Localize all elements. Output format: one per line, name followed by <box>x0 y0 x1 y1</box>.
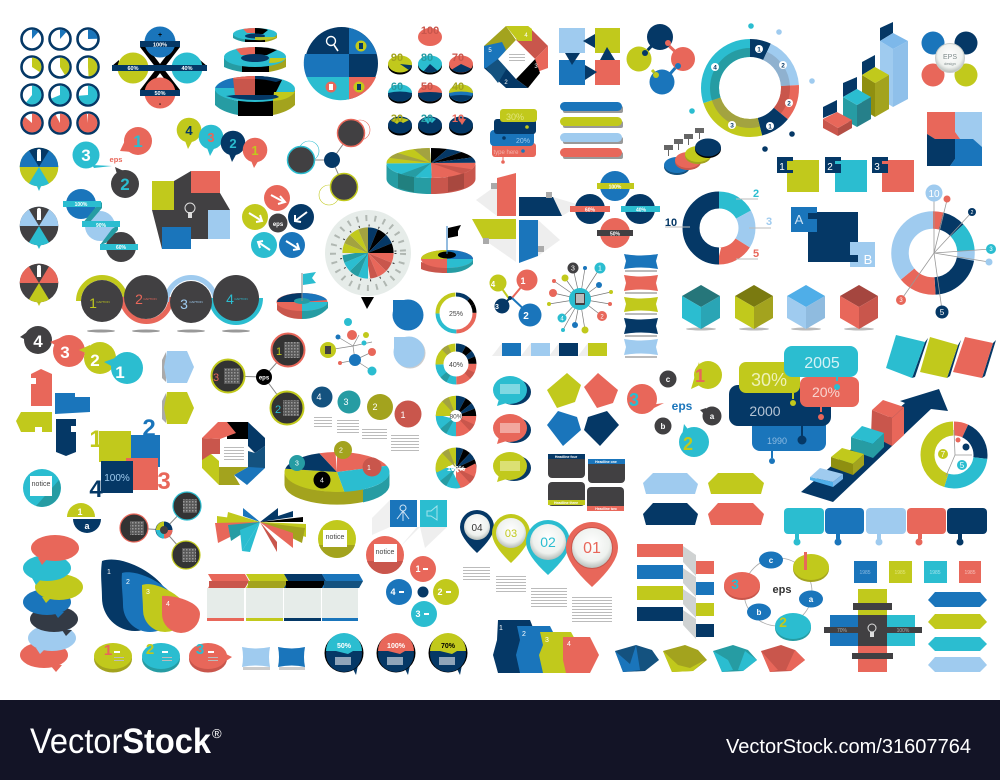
caption circles chain <box>78 275 260 332</box>
numbered overlapping squares 100%: 4 <box>89 476 103 503</box>
eps ring of bubbles top: 2 <box>683 434 693 454</box>
donut with radial labels: 3 <box>989 247 993 253</box>
ring chart 80% <box>443 403 469 429</box>
tablet hub with numbered spokes: 3 <box>571 266 575 272</box>
notice circle olive <box>318 520 356 558</box>
stacked percent labels 30 20 type here <box>490 109 537 164</box>
numbered squares 1 2 3 <box>777 157 914 192</box>
segmented donut 1-2-2-1-3-4: 2 <box>781 62 785 70</box>
abc disc cycle <box>724 552 829 641</box>
octagon four-step diagram: 2 <box>504 80 508 86</box>
3D percent mini pies: 80 <box>421 52 433 64</box>
plain blue tabbed circle <box>392 300 424 330</box>
abc disc cycle: eps <box>773 584 791 596</box>
abc disc cycle: 3 <box>731 576 739 592</box>
octagon four-step diagram: 4 <box>524 33 528 39</box>
caption circles chain: 4 <box>226 291 234 307</box>
four circles with EPS badge: design <box>944 61 956 66</box>
footer band: ® <box>212 726 222 741</box>
donut with radial labels: 2 <box>971 210 974 216</box>
radial fan of folded blades <box>215 508 306 552</box>
outer ring <box>710 48 790 128</box>
speech bubbles 4 3 2 1 <box>177 118 267 168</box>
four ribbon circles 100 60 40 50: 60% <box>585 208 596 214</box>
headline panels: Headline four <box>555 455 578 459</box>
disc notes 1 2 3 <box>94 641 232 672</box>
pill list <box>560 102 623 159</box>
person pie: red dark <box>20 264 58 306</box>
segmented donut 1-2-2-1-3-4: 1 <box>768 124 772 130</box>
year callout cluster: 1990 <box>767 436 787 446</box>
ring chart 40%: 40% <box>449 362 463 369</box>
four squares with triangles <box>559 28 620 85</box>
stacked 3D rings <box>215 28 295 116</box>
stacked percent labels 30 20 type here: 30% <box>506 112 524 122</box>
ring medium <box>224 47 286 72</box>
pinched squares <box>242 647 305 670</box>
numbered overlapping squares 100%: 2 <box>142 415 156 442</box>
spheres 4 3 2 1: 2 <box>372 402 378 412</box>
A B overlapping squares: B <box>864 252 872 267</box>
1985 squares <box>854 561 981 583</box>
cross with lightbulb and bars: 70% <box>837 628 848 634</box>
four ribbon circles 100 60 40 50: 50% <box>610 232 621 238</box>
teal bubble with 3: 3 <box>81 146 91 165</box>
four-tile square <box>927 112 982 166</box>
overlapping speech stickers 4 3 2 1 <box>20 326 143 384</box>
cluster of numbered circles: 3 <box>415 609 421 619</box>
icon squares person and speaker <box>372 500 447 548</box>
stacked speech ovals <box>20 535 83 672</box>
3D bar chart with flags <box>823 22 908 136</box>
eps label red: eps <box>110 155 122 164</box>
full pie 100% <box>446 458 466 478</box>
clock ring percent grid <box>22 28 98 134</box>
numbered overlapping squares 100%: 1 <box>89 426 103 453</box>
cluster of numbered circles: 4 <box>390 587 396 597</box>
donut 7 3 5 with lines: 7 <box>941 450 946 459</box>
donut 10 2 3 5: 2 <box>753 188 759 200</box>
overlapping speech stickers 4 3 2 1: 2 <box>90 351 100 370</box>
cross of percent circles: 50% <box>154 91 166 97</box>
caption circles chain: 1 <box>89 295 97 311</box>
hex steps 1 2 3 4: 3 <box>545 637 549 644</box>
location pins 04 03 02 01: 01 <box>583 540 601 557</box>
hub network with dark circles <box>288 120 370 205</box>
ring chart 80%: 80% <box>449 414 463 420</box>
full pie 100%: 100% <box>447 466 466 473</box>
3D percent mini pies: 90 <box>391 52 403 64</box>
caption circles chain: CAPTION <box>234 297 248 301</box>
cross of percent circles: 100% <box>153 42 167 48</box>
cluster of numbered circles: 1 <box>415 564 421 574</box>
cross of percent circles: 60% <box>127 66 139 72</box>
teardrop steps 1 2 3 4: 4 <box>166 601 170 608</box>
notice circle red <box>366 536 404 574</box>
eps ring of bubbles top: 1 <box>695 366 705 386</box>
spheres 4 3 2 1: 1 <box>400 410 406 420</box>
cluster of numbered circles <box>386 556 459 627</box>
numbered overlapping squares 100% <box>89 415 171 503</box>
eps ring of bubbles top: b <box>661 422 666 431</box>
four node network: 1 <box>520 276 526 286</box>
octagon four-step diagram: 5 <box>488 48 492 54</box>
speech circle 50%: 50% <box>337 643 352 650</box>
textured three-circle network: eps <box>259 376 270 382</box>
3D pie with balls: 4 <box>320 478 324 484</box>
arrow headed columns <box>207 574 363 621</box>
speech bubbles 4 3 2 1: 3 <box>207 130 215 145</box>
donut 7 3 5 with lines <box>928 428 980 482</box>
A B overlapping squares: A <box>795 212 804 227</box>
speech circle 70% <box>428 633 468 675</box>
speech circle 50% <box>324 633 364 675</box>
1985 squares: 1985 <box>859 570 871 576</box>
notice circle red: notice <box>376 549 394 556</box>
half circles 1 and a <box>67 503 101 533</box>
callout tab row <box>784 508 987 546</box>
A B overlapping squares <box>791 207 875 267</box>
small color squares row <box>492 343 607 356</box>
3D percent mini pies: 10 <box>452 113 464 125</box>
half circles 1 and a: 1 <box>77 507 83 517</box>
light blue hexagon tab <box>162 351 194 383</box>
headline panels: Headline three <box>554 501 578 505</box>
person pie: light blue dark <box>20 207 58 249</box>
notice circle teal <box>23 469 61 507</box>
eps ring of bubbles top: a <box>710 412 715 421</box>
location pins 04 03 02 01 <box>460 510 618 587</box>
folded pinwheel panels <box>472 173 580 263</box>
hex steps 1 2 3 4 <box>493 620 599 673</box>
abc disc cycle: c <box>769 556 774 565</box>
disc notes 1 2 3: 3 <box>196 641 204 658</box>
overlapping speech stickers 4 3 2 1: 4 <box>33 332 43 351</box>
segmented donut 1-2-2-1-3-4 <box>689 23 815 152</box>
arrow circles around eps <box>242 185 314 258</box>
spheres 4 3 2 1 <box>312 386 422 428</box>
3D pie with balls: 2 <box>339 448 343 454</box>
grey text blocks beside spheres <box>314 417 419 452</box>
cluster of numbered circles: 2 <box>437 587 443 597</box>
donut 7 3 5 with lines: 5 <box>960 461 965 470</box>
tilted cards <box>886 335 996 378</box>
donut with radial labels: 10 <box>928 189 940 200</box>
speech bubbles 4 3 2 1: 1 <box>251 143 259 158</box>
four ribbon circles 100 60 40 50: 40% <box>636 208 647 214</box>
abc disc cycle: b <box>757 608 762 617</box>
cross of percent circles: + <box>158 32 162 39</box>
four node network <box>490 270 542 326</box>
3D pie with balls: 1 <box>367 465 371 472</box>
year callout cluster: 20% <box>812 384 840 400</box>
donut 10 2 3 5: 5 <box>753 248 759 260</box>
person pie: blue olive <box>20 148 58 191</box>
3D percent mini pies <box>388 25 473 136</box>
disc notes 1 2 3: 1 <box>104 642 112 659</box>
speech bubble red <box>493 414 531 444</box>
teardrop steps 1 2 3 4: 2 <box>126 579 130 586</box>
red bubble with 1: 1 <box>133 132 143 151</box>
segmented donut 1-2-2-1-3-4: 4 <box>713 64 717 72</box>
hex steps 1 2 3 4: 4 <box>567 641 571 648</box>
year callout cluster: 30% <box>751 370 787 390</box>
eps ring of bubbles top: 3 <box>629 390 639 410</box>
cross with lightbulb and bars: 100% <box>897 628 910 634</box>
teardrop steps 1 2 3 4: 1 <box>107 569 111 576</box>
1985 squares: 1985 <box>964 570 976 576</box>
speech bubbles 4 3 2 1: 2 <box>229 136 237 151</box>
speech circle 100% <box>376 633 416 675</box>
abc disc cycle: 2 <box>779 614 787 630</box>
segmented donut 1-2-2-1-3-4: 1 <box>757 46 761 54</box>
tablet hub with numbered spokes: 2 <box>600 314 604 320</box>
3D pie with balls: 3 <box>295 460 299 468</box>
textured three-circle network: 2 <box>275 404 281 416</box>
hexagon strips <box>928 592 987 672</box>
year callout cluster: 2000 <box>749 403 781 419</box>
notice circle olive: notice <box>326 534 344 541</box>
folded horizontal list <box>637 544 714 639</box>
overlapping speech stickers 4 3 2 1: 1 <box>115 363 125 382</box>
circle with search icon grid <box>304 27 378 100</box>
four circles with EPS badge <box>922 32 978 86</box>
teardrop steps 1 2 3 4 <box>101 560 200 633</box>
3D percent mini pies: 100 <box>421 25 439 37</box>
tablet hub with numbered spokes <box>547 262 613 334</box>
numbered squares 1 2 3: 3 <box>874 162 880 173</box>
segmented donut 1-2-2-1-3-4: 2 <box>787 100 791 108</box>
stair of ribbon circles 100 90 60 <box>63 189 138 262</box>
segmented donut 1-2-2-1-3-4: 3 <box>730 122 734 130</box>
four squares around lightbulb <box>152 171 230 249</box>
small textured network <box>120 492 201 569</box>
cross of percent circles: 40% <box>181 66 193 72</box>
hex steps 1 2 3 4: 1 <box>499 625 503 632</box>
black pointer triangle <box>361 297 374 309</box>
donut with radial labels: 3 <box>899 298 903 304</box>
ring chart 25% <box>438 294 474 332</box>
footer band <box>0 700 1000 780</box>
radial wheel with pie <box>325 210 411 296</box>
ribbon stack <box>624 254 658 358</box>
textured three-circle network <box>212 334 304 424</box>
spheres 4 3 2 1: 4 <box>316 392 322 402</box>
four node network: 2 <box>523 311 529 322</box>
donut 10 2 3 5: 3 <box>766 216 772 228</box>
flag on disc, teal flag <box>276 272 328 319</box>
numbered squares 1 2 3: 1 <box>779 162 785 173</box>
row of 3D cubes <box>682 285 878 330</box>
teal bubble with 3 <box>72 142 112 168</box>
3D percent mini pies: 70 <box>452 52 464 64</box>
donut with radial labels: 5 <box>940 308 945 317</box>
numbered overlapping squares 100%: 3 <box>157 468 171 495</box>
four node network: 3 <box>495 304 499 311</box>
footer band: VectorStock.com/31607764 <box>726 736 971 758</box>
caption circles chain: 2 <box>135 291 143 307</box>
flag on disc, black flag <box>421 225 473 273</box>
donut 10 2 3 5 <box>665 188 772 260</box>
four node network: 4 <box>491 280 496 289</box>
speech bubbles 4 3 2 1: 4 <box>185 123 193 138</box>
3D pie with balls <box>284 441 390 505</box>
stacked discs on sign posts <box>664 128 721 175</box>
dark bubble with 2 <box>111 167 139 198</box>
ring chart 40% <box>440 348 472 380</box>
stair of ribbon circles 100 90 60: 60% <box>116 245 127 251</box>
olive hexagon tab <box>162 392 194 424</box>
3D percent mini pies: 50 <box>421 81 433 93</box>
numbered squares 1 2 3: 2 <box>827 162 833 173</box>
stacked percent labels 30 20 type here: type here <box>493 150 519 156</box>
trapezoid banners <box>643 473 764 525</box>
year callout cluster: 2005 <box>804 355 840 372</box>
ring chart 25%: 25% <box>449 311 463 318</box>
1985 squares: 1985 <box>929 570 941 576</box>
stair of ribbon circles 100 90 60: 90% <box>96 223 107 229</box>
small hub with red tablet <box>320 318 376 376</box>
donut 10 2 3 5: 10 <box>665 217 677 229</box>
octagon four-step diagram <box>484 26 548 88</box>
half circles 1 and a: a <box>84 521 90 531</box>
four circles with EPS badge: EPS <box>943 54 957 61</box>
eps ring of bubbles top <box>627 361 722 457</box>
location pins 04 03 02 01: 02 <box>540 534 556 550</box>
caption circles chain: CAPTION <box>189 300 203 304</box>
speech circle 70%: 70% <box>441 643 456 650</box>
year callout cluster <box>729 346 859 464</box>
four folded notes <box>16 369 90 456</box>
eps ring of bubbles top: eps <box>672 399 693 413</box>
stacked percent labels 30 20 type here: 20% <box>516 138 530 145</box>
footer band: VectorStock <box>30 722 211 761</box>
speech bubble teal <box>493 376 531 406</box>
disc notes 1 2 3: 2 <box>146 641 154 658</box>
ring small <box>233 28 277 42</box>
red bubble with 1 <box>120 127 152 155</box>
octagon four-step diagram: 3 <box>534 64 538 70</box>
1985 squares: 1985 <box>894 570 906 576</box>
octagon process with five steps <box>202 422 265 485</box>
eps ring of bubbles top: c <box>666 375 671 384</box>
four ribbon circles 100 60 40 50: 100% <box>609 184 622 190</box>
3D percent mini pies: 30 <box>391 113 403 125</box>
teardrop steps 1 2 3 4: 3 <box>146 589 150 596</box>
ring large <box>215 76 295 116</box>
headline panels: Headline one <box>595 460 617 464</box>
tablet hub with numbered spokes: 1 <box>598 266 602 272</box>
donut with radial labels <box>896 184 996 318</box>
numbered overlapping squares 100%: 100% <box>104 473 130 484</box>
stair of ribbon circles 100 90 60: 100% <box>75 202 88 208</box>
3D percent mini pies: 40 <box>452 81 464 93</box>
four ribbon circles 100 60 40 50 <box>570 171 660 248</box>
caption circles chain: CAPTION <box>143 297 157 301</box>
caption circles chain: 3 <box>180 296 188 312</box>
overlapping speech stickers 4 3 2 1: 3 <box>60 343 70 362</box>
textured three-circle network: 3 <box>213 372 219 384</box>
grey pin descriptions <box>463 565 612 622</box>
spheres 4 3 2 1: 3 <box>343 397 349 407</box>
location pins 04 03 02 01: 04 <box>471 523 483 534</box>
notice circle teal: notice <box>32 481 50 488</box>
speech circle 100%: 100% <box>387 643 406 650</box>
arrow circles around eps: eps <box>273 222 284 228</box>
headline panels: Headline two <box>595 507 617 511</box>
speech bubble olive <box>493 452 531 482</box>
cross of percent circles: - <box>159 101 162 108</box>
3D big pie <box>386 156 476 194</box>
location pins 04 03 02 01: 03 <box>505 528 517 540</box>
origami polygons <box>615 645 805 672</box>
four pentagons <box>547 373 619 446</box>
plain light blue tabbed circle <box>394 336 426 368</box>
cross of percent circles <box>112 26 207 108</box>
inner shade ring <box>714 52 786 124</box>
rising arrow with cubes <box>801 389 948 502</box>
hex steps 1 2 3 4: 2 <box>522 631 526 638</box>
abc disc cycle: a <box>809 595 814 604</box>
3D percent mini pies: 20 <box>421 113 433 125</box>
headline panels <box>548 454 625 511</box>
dark bubble with 2: 2 <box>120 175 130 194</box>
linked blob network <box>626 24 695 94</box>
textured three-circle network: 1 <box>276 346 282 358</box>
tablet hub with numbered spokes: 4 <box>560 316 564 322</box>
caption circles chain: CAPTION <box>96 300 110 304</box>
3D percent mini pies: 60 <box>391 81 403 93</box>
cross with lightbulb and bars <box>824 589 922 672</box>
